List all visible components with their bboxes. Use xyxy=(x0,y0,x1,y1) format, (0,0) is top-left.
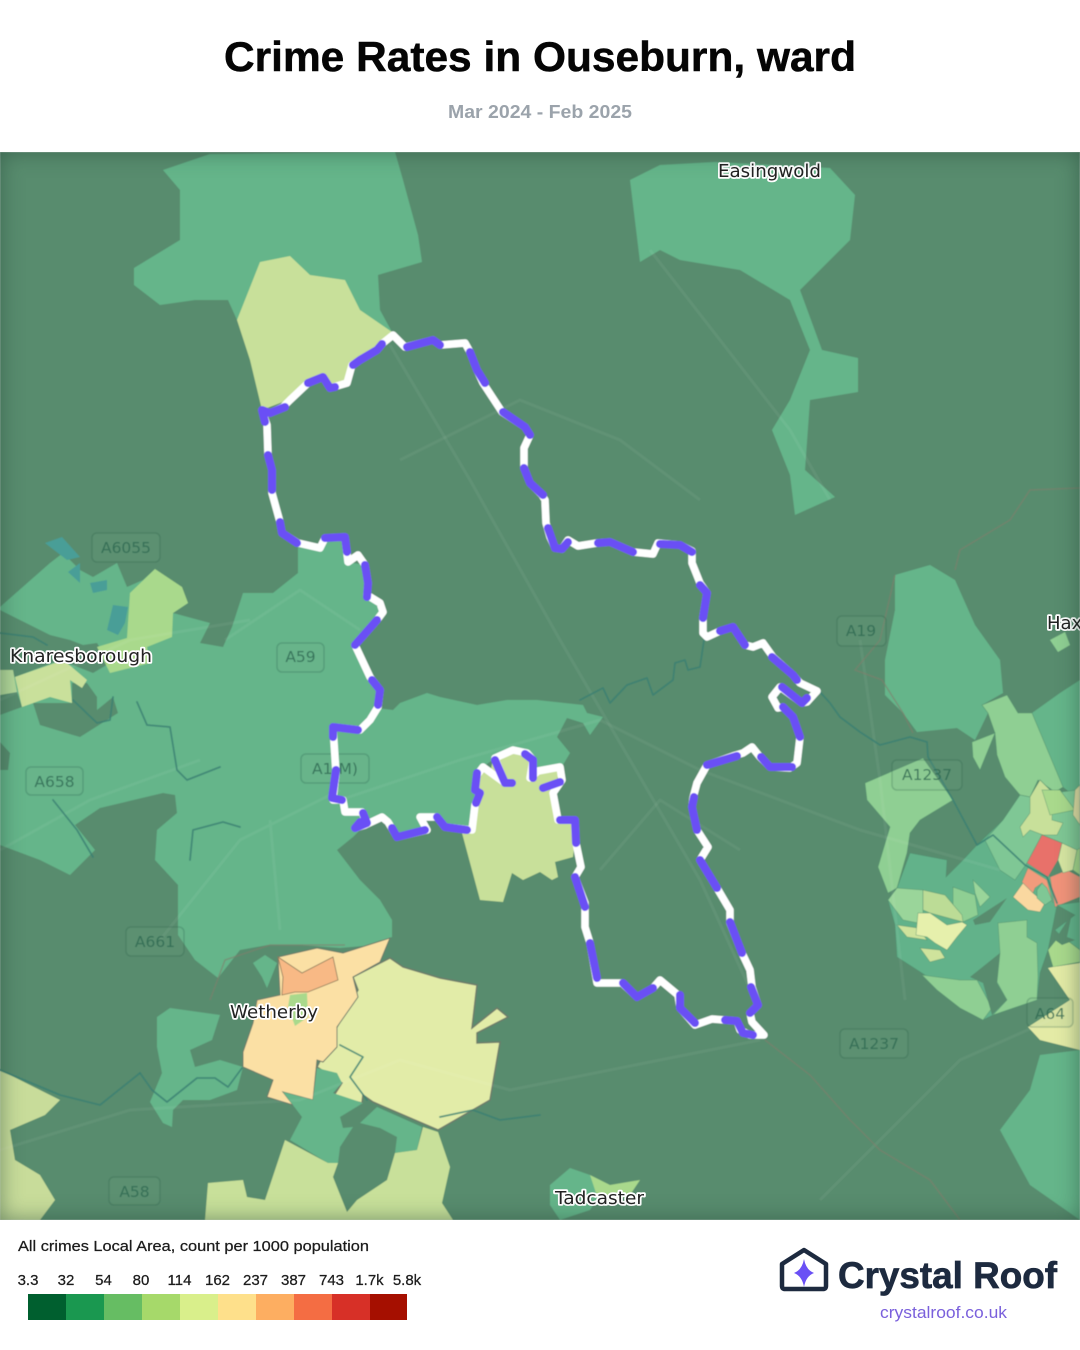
title: Crime Rates in Ouseburn, ward xyxy=(224,33,856,80)
place label: Knaresborough: Knaresborough xyxy=(10,646,152,667)
Crystal Roof logo xyxy=(782,1250,1058,1322)
Wetherby large pale area xyxy=(317,958,508,1130)
road label: A661 xyxy=(126,927,184,956)
north-east green of York xyxy=(1032,680,1080,800)
road label: A658: A658 xyxy=(34,773,75,791)
place label: Easingwold: Easingwold xyxy=(718,161,821,182)
small area by Hax xyxy=(1050,632,1070,652)
road label: A59 xyxy=(277,643,324,672)
legend scale numbers: 3.3 xyxy=(18,1272,38,1289)
south-east cream area xyxy=(1028,963,1080,1050)
road label: A58: A58 xyxy=(119,1183,150,1201)
roads xyxy=(0,250,1050,1200)
legend scale numbers: 54 xyxy=(95,1272,112,1289)
map panel xyxy=(0,152,1080,1220)
legend xyxy=(18,1238,422,1320)
south green areas xyxy=(283,1068,363,1163)
road label: A1237 north: A1237 xyxy=(902,766,952,784)
road label: A19: A19 xyxy=(846,622,876,640)
legend scale numbers: 387 xyxy=(281,1272,306,1289)
Ouseburn ward boundary: purple dashes xyxy=(262,340,807,1035)
map edge vignette xyxy=(0,152,1080,1220)
date range subtitle: Mar 2024 - Feb 2025 xyxy=(448,102,632,122)
central green area xyxy=(333,693,603,837)
Wetherby small green patch xyxy=(253,955,277,988)
rivers xyxy=(0,633,1057,1120)
legend scale numbers: 114 xyxy=(168,1272,191,1289)
York cluster base xyxy=(888,800,1057,1020)
website url: crystalroof.co.uk xyxy=(880,1303,1008,1322)
road label: A1(M) xyxy=(301,754,369,783)
lakes xyxy=(45,537,128,635)
south-east green area xyxy=(1000,1050,1080,1220)
Wetherby orange area xyxy=(278,957,338,995)
York red ward xyxy=(1027,835,1062,877)
road label: A1237 north xyxy=(892,760,962,790)
road label: A59: A59 xyxy=(285,648,316,666)
west large green area xyxy=(0,537,392,978)
road label: A6055: A6055 xyxy=(101,539,151,557)
north-west green area xyxy=(134,152,422,332)
Wetherby small green area xyxy=(288,993,308,1026)
icon: house with star xyxy=(782,1250,826,1289)
legend scale numbers: 743 xyxy=(319,1272,344,1289)
Easingwold green area xyxy=(630,162,858,515)
York dark patches xyxy=(970,898,1075,1015)
road label: A1237 south: A1237 xyxy=(849,1035,899,1053)
road label: A658 xyxy=(26,767,83,795)
place label: Wetherby: Wetherby xyxy=(230,1002,318,1023)
road label: A64 xyxy=(1027,998,1073,1027)
legend scale numbers: 162 xyxy=(205,1272,230,1289)
north yellow-green area xyxy=(237,256,392,410)
logo wordmark: Crystal Roof xyxy=(838,1255,1058,1296)
Linton green area xyxy=(150,1008,243,1127)
York light-green areas xyxy=(865,695,1080,1020)
east green area xyxy=(885,565,1003,740)
Ouseburn ward boundary: white base line xyxy=(262,335,817,1035)
legend scale numbers: 80 xyxy=(133,1272,149,1289)
legend scale numbers: 5.8k xyxy=(393,1272,422,1289)
place label: Tadcaster: Tadcaster xyxy=(554,1188,645,1209)
road label: A1237 south xyxy=(840,1029,908,1058)
road label: A64: A64 xyxy=(1035,1005,1065,1023)
Wetherby cream area xyxy=(243,938,390,1105)
road label: A6055 xyxy=(92,533,160,562)
legend title: All crimes Local Area, count per 1000 population xyxy=(18,1238,369,1255)
south yellow-green area xyxy=(205,1127,453,1220)
legend scale numbers: 1.7k xyxy=(355,1272,384,1289)
Knaresborough light areas xyxy=(0,569,188,707)
road label: A19 xyxy=(837,616,886,646)
legend scale numbers: 237 xyxy=(243,1272,268,1289)
Tadcaster areas xyxy=(550,1168,600,1220)
road label: A1(M): A1(M) xyxy=(312,760,358,778)
south-west pale area xyxy=(0,1070,60,1220)
road label: A661: A661 xyxy=(135,933,175,951)
legend scale numbers xyxy=(18,1272,422,1289)
legend colour ramp xyxy=(28,1294,407,1320)
area boundaries xyxy=(210,488,1080,1220)
west dark patches xyxy=(0,610,118,770)
legend scale numbers: 32 xyxy=(58,1272,74,1289)
road label: A58 xyxy=(109,1177,160,1205)
Ouseburn yellow-green area xyxy=(462,748,577,902)
